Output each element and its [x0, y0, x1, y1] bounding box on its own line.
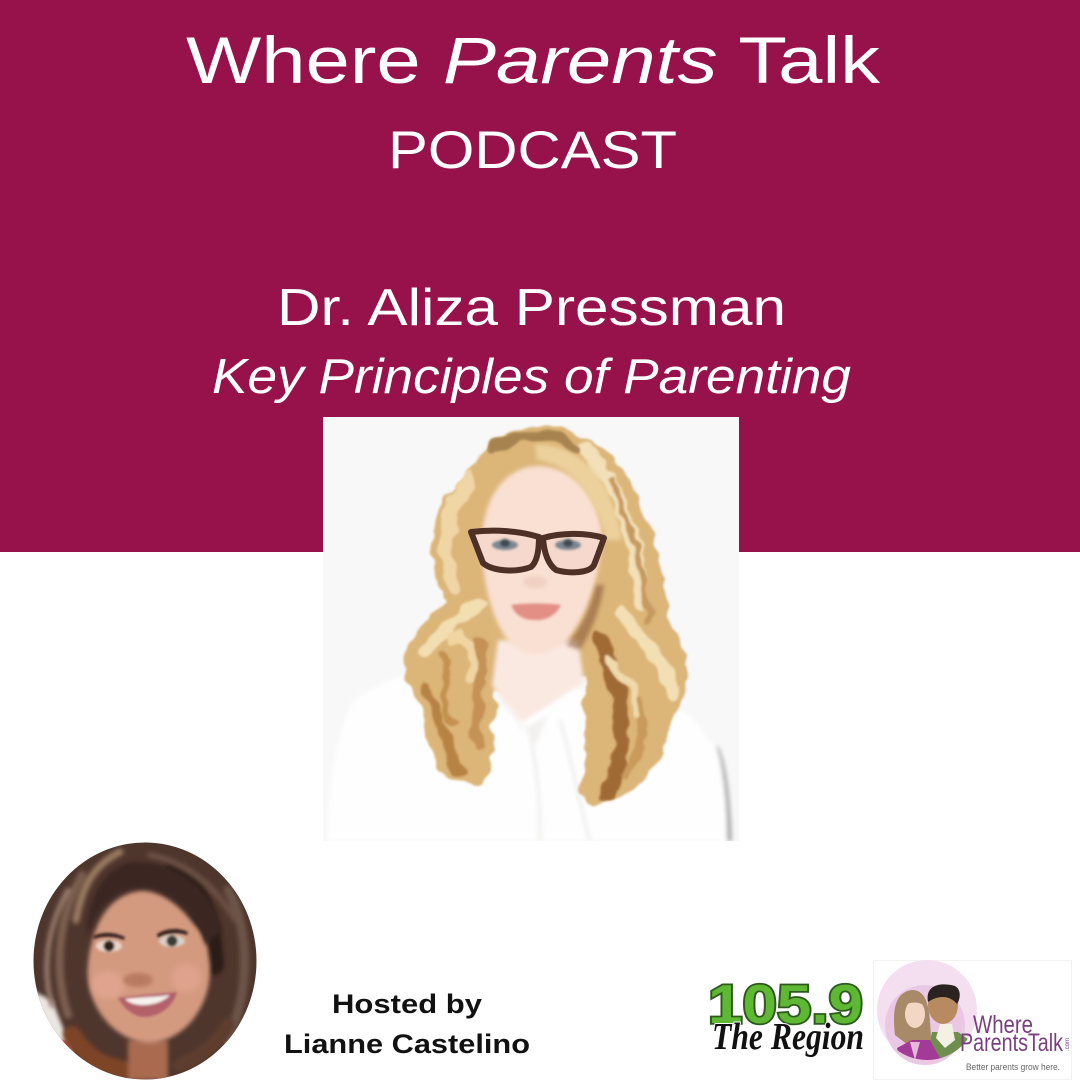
- host neck: [128, 1040, 168, 1080]
- title line: Where Parents Talk: Where Parents Talk: [186, 23, 881, 97]
- host name: Lianne Castelino: [284, 1029, 530, 1059]
- logo word: Where: Where: [973, 1011, 1033, 1039]
- host brows and eyes: [93, 929, 188, 952]
- host cheeks: [92, 971, 124, 999]
- glasses: [471, 531, 604, 572]
- left lens: [471, 531, 539, 570]
- shirt: [716, 746, 734, 841]
- man: [926, 1032, 968, 1060]
- right lens: [543, 534, 604, 572]
- hair back: [403, 425, 689, 808]
- guest details: [212, 279, 851, 404]
- eyes: [492, 539, 581, 550]
- subtitle: PODCAST: PODCAST: [388, 121, 677, 180]
- logo circle: [877, 960, 977, 1060]
- logo script: The Region: [712, 1016, 864, 1058]
- hair over forehead: [535, 444, 622, 540]
- logo: 105.9 The Region: [708, 973, 864, 1058]
- host face: [88, 891, 210, 1043]
- title: [186, 23, 881, 180]
- hosted by: Hosted by: [332, 989, 482, 1019]
- lips: [511, 604, 561, 620]
- jaw shade: [566, 585, 604, 650]
- logo number: 105.9: [708, 973, 863, 1035]
- host hair: [47, 852, 244, 1070]
- host light backdrop: [37, 990, 74, 1052]
- logo: Where Parents Talk: [874, 960, 1072, 1080]
- logo couple: [894, 984, 972, 1062]
- hair strands: [425, 435, 672, 795]
- guest name: Dr. Aliza Pressman: [277, 279, 786, 337]
- host smile: [118, 992, 177, 1017]
- guest photo: Dr. Aliza Pressman: [323, 417, 739, 841]
- logo word: .com: .com: [1065, 1038, 1071, 1051]
- host red accent: [61, 1038, 72, 1050]
- host fringe: [86, 862, 222, 945]
- host nose shade: [123, 973, 153, 987]
- background band: [0, 0, 1080, 552]
- woman: [894, 990, 931, 1048]
- episode topic: Key Principles of Parenting: [212, 350, 851, 404]
- logo tagline: Better parents grow here.: [966, 1062, 1060, 1072]
- host credit: [284, 989, 530, 1059]
- nose shade: [523, 576, 547, 588]
- neck: [492, 640, 584, 722]
- face: [482, 466, 602, 654]
- logo frame: [874, 960, 1072, 1080]
- host photo: Lianne Castelino: [30, 840, 260, 1080]
